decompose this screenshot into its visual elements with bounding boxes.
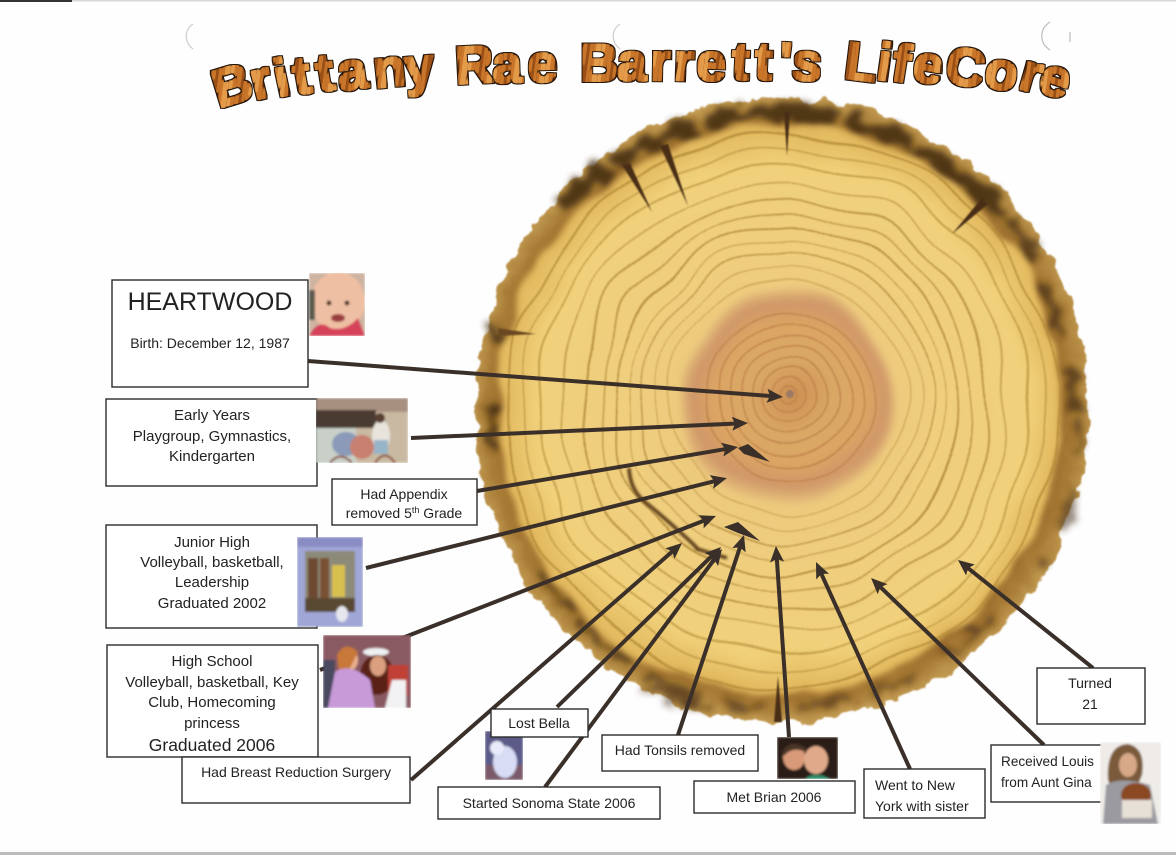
bark rim [475,98,1089,722]
photo: graduation [323,635,411,708]
box: high school: Club, Homecoming [148,694,276,711]
growth rings [507,135,1057,685]
box: lost bella: Lost Bella [508,715,570,731]
arrow: heartwood to pith [308,361,775,396]
box: breast reduction surgery: Had Breast Reduction Surgery [201,764,391,780]
heartwood [684,288,892,504]
box: high school: High School [172,653,252,670]
box: met brian: Met Brian 2006 [727,789,822,805]
arrow: turned 21 [964,565,1093,668]
arrow: louis [877,584,1044,745]
box: junior high: Junior High [174,534,250,551]
box: appendix: Grade [419,505,462,521]
box: turned 21 [1037,668,1145,724]
box: breast reduction surgery [182,757,410,803]
box: early years: Kindergarten [169,448,255,465]
photo: baby [309,272,365,336]
box: met brian [694,781,855,813]
tree cross-section [475,98,1089,722]
box: tonsils [602,735,758,771]
box: high school: princess [184,715,240,732]
title: Brittany Rae Barrett's LifeCore [205,31,1080,119]
arrow: appendix [477,448,730,491]
box: junior high: Leadership [175,574,249,591]
box: heartwood: Birth: December 12, 1987 [130,335,290,351]
box: new york [864,769,985,818]
arrow: lost bella [557,553,715,707]
box: heartwood: HEARTWOOD [128,288,292,316]
photo: dog [485,731,523,780]
arrow: new york [819,569,910,769]
arrow: early years [411,423,740,438]
box: early years [106,399,317,486]
box: junior high [106,525,317,628]
box: turned 21: 21 [1082,696,1098,712]
arrows [308,361,1093,787]
box: appendix: th [412,505,419,515]
box: new york: York with sister [875,798,969,814]
box: louis: Received Louis [1001,754,1094,769]
box: junior high: Graduated 2002 [158,595,266,612]
arrow: breast reduction surgery [411,548,676,780]
box: high school: Volleyball, basketball, Key [125,674,299,691]
sapwood disc [499,125,1061,695]
box: high school [107,645,318,757]
box: appendix [332,479,477,525]
box: new york: Went to New [875,777,956,793]
box: tonsils: Had Tonsils removed [615,742,745,758]
photo: yearbook [297,537,363,627]
box: lost bella [491,709,588,737]
photo: couple [777,737,838,779]
stray arrowhead near tonsils [724,522,760,541]
box: appendix: removed 5 [346,505,412,521]
box: appendix: Had Appendix [360,486,448,502]
arrow: met brian [776,554,789,737]
box: heartwood [112,280,308,387]
box: sonoma state [438,787,660,819]
dark cracks [498,112,988,722]
box: turned 21: Turned [1068,675,1112,691]
box: louis [991,745,1103,802]
box: early years: Early Years [174,407,250,424]
box: high school: Graduated 2006 [149,735,275,755]
arrow: junior high [366,480,719,568]
box: louis: from Aunt Gina [1001,775,1092,790]
photo: bikes [316,398,408,463]
photo: girl with dog [1100,742,1161,824]
arrow: tonsils [678,543,742,735]
box: junior high: Volleyball, basketball, [140,554,284,571]
arrow: sonoma state [545,555,717,787]
arrow: high school [320,519,708,670]
box: early years: Playgroup, Gymnastics, [133,428,291,445]
box: sonoma state: Started Sonoma State 2006 [463,795,636,811]
stray arrowhead near appendix [738,444,770,462]
